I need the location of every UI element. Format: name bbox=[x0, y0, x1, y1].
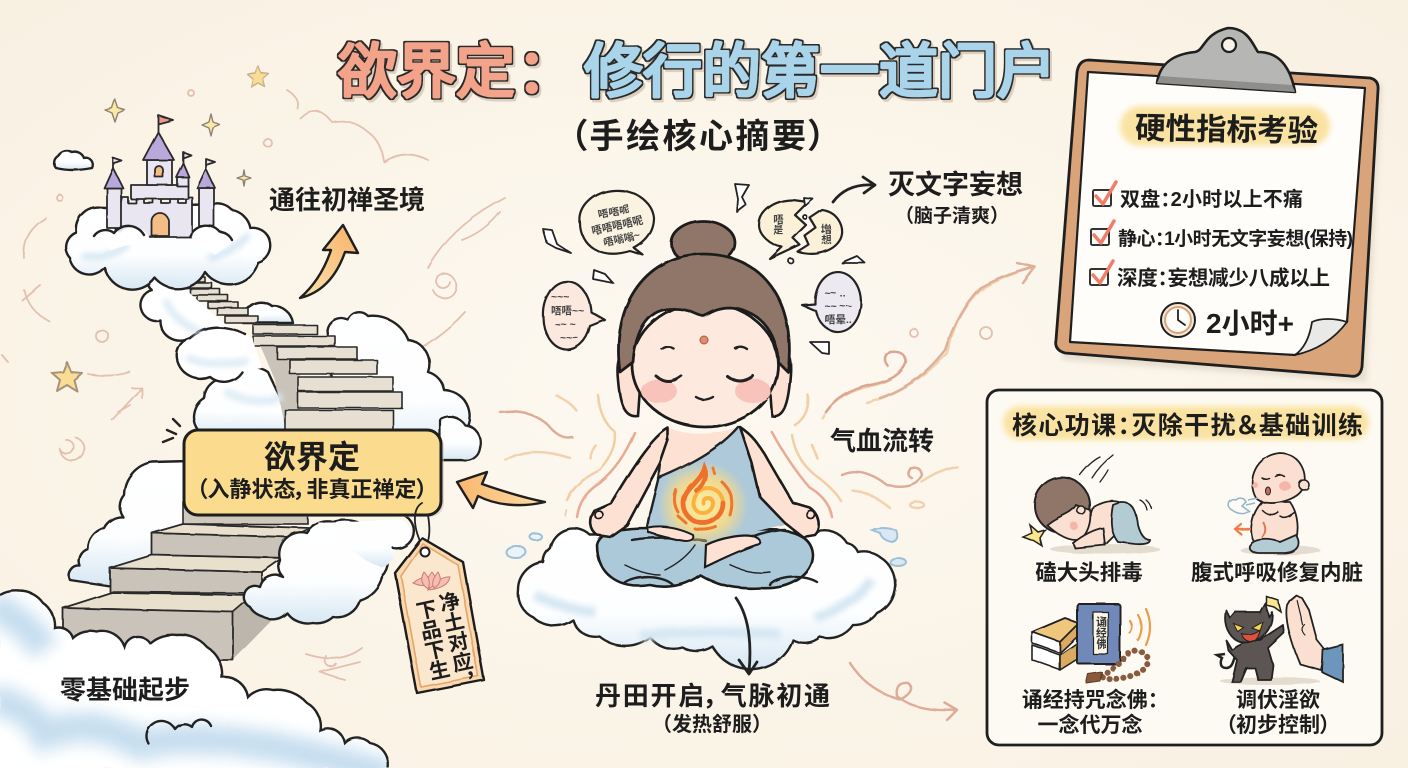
bubble 3 broken: 唔是 bbox=[772, 214, 784, 236]
castle on cloud bbox=[66, 115, 271, 290]
icon: clock bbox=[1161, 303, 1195, 337]
duration label: 2小时+ bbox=[1206, 308, 1294, 339]
label: wordless thought: 灭文字妄想 bbox=[888, 170, 1023, 200]
bubble 2: ~~ ~ bbox=[555, 319, 576, 331]
bubble 2: ~~~ bbox=[551, 291, 569, 303]
practice label 1: 磕大头排毒 bbox=[1035, 561, 1143, 585]
clipboard heading: 硬性指标考验 bbox=[1135, 111, 1318, 149]
label: to first dhyana: 通往初禅圣境 bbox=[269, 185, 425, 215]
label: clear head: （脑子清爽） bbox=[895, 205, 1009, 227]
icon: bowing child bbox=[1023, 455, 1160, 554]
bubble 4: ~~ ~~ bbox=[824, 300, 851, 312]
icon: breathing child bbox=[1229, 453, 1320, 555]
label: dantian: 丹田开启，气脉初通 bbox=[595, 681, 830, 711]
bubble 2: ~~~ bbox=[560, 332, 578, 344]
icon: sutras and beads: 诵经佛 bbox=[1094, 615, 1107, 650]
head bbox=[618, 221, 791, 427]
back clouds bbox=[69, 302, 481, 586]
bubble 2 bbox=[543, 281, 605, 350]
label: warmth: （发热舒服） bbox=[652, 712, 772, 736]
label: qi blood: 气血流转 bbox=[830, 426, 934, 456]
bubble 3 broken bbox=[759, 200, 842, 259]
panel heading: 核心功课：灭除干扰＆基础训练 bbox=[1012, 411, 1363, 440]
arms bbox=[591, 427, 819, 537]
stars bbox=[52, 66, 269, 391]
yellow box bbox=[184, 430, 444, 517]
tag text column 1: 净土对应， bbox=[434, 589, 479, 695]
decorative doodle lines bbox=[2, 90, 1035, 720]
checklist item 2: 静心：1小时无文字妄想(保持) bbox=[1118, 227, 1353, 250]
title: 欲界定：修行的第一道门户 bbox=[338, 24, 1056, 109]
upper stairs bbox=[152, 240, 402, 430]
checklist item 3: 深度：妄想减少八成以上 bbox=[1117, 266, 1330, 290]
core practice panel bbox=[987, 390, 1382, 745]
lower stairs bbox=[63, 500, 310, 660]
checklist item 1 bbox=[1093, 182, 1303, 211]
bubble 1: 唔嗡嗡~ bbox=[602, 230, 642, 249]
legs and robe bbox=[597, 427, 817, 588]
buddha figure bbox=[518, 221, 895, 670]
front cloud lower right bbox=[244, 514, 414, 624]
subtitle: （手绘核心摘要） bbox=[570, 118, 828, 156]
practice label 4b: （初步控制） bbox=[1226, 714, 1330, 737]
arrow: down to dantian bbox=[736, 598, 757, 674]
icon: devil and hand bbox=[1217, 595, 1343, 685]
arrow: to wordless bbox=[833, 177, 875, 202]
big cloud bottom left bbox=[0, 591, 390, 768]
tag text column 2: 下品下生 bbox=[411, 597, 452, 683]
practice label 2: 腹式呼吸修复内脏 bbox=[1191, 561, 1363, 585]
bubble 1 bbox=[580, 190, 654, 255]
arrow: to yellow box bbox=[457, 472, 545, 508]
cloud seat bbox=[518, 528, 895, 670]
bubble 4 bbox=[802, 272, 861, 332]
icon: sutras and beads bbox=[1032, 604, 1150, 683]
arrow: up to castle bbox=[300, 225, 358, 298]
icon: lotus bbox=[413, 572, 450, 590]
bubble 3 broken: 增想 bbox=[820, 223, 832, 245]
spiral dantian bbox=[674, 468, 732, 530]
clouds beside stairs bbox=[140, 272, 282, 401]
box subtitle: （入静状态，非真正禅定） bbox=[196, 477, 428, 502]
bubble 2: 唔唔~~ bbox=[551, 305, 584, 317]
label: start: 零基础起步 bbox=[60, 675, 190, 705]
small cloud bbox=[54, 151, 93, 170]
speech bubbles bbox=[543, 184, 865, 354]
practice label 3b: 一念代万念 bbox=[1038, 713, 1142, 737]
hanging tag bbox=[395, 503, 484, 695]
bubble 4: 唔晕.. bbox=[825, 314, 852, 326]
metal clip bbox=[1157, 28, 1295, 92]
bubble 1: 唔唔呢 bbox=[597, 203, 631, 222]
practice label 3: 诵经持咒念佛： bbox=[1022, 688, 1158, 712]
shards bbox=[543, 184, 865, 354]
staircase scene bbox=[0, 66, 481, 768]
bubble 1: 唔唔唔唔呢 bbox=[591, 215, 645, 237]
box title: 欲界定 bbox=[264, 439, 360, 475]
checklist item 1: 双盘：2小时以上不痛 bbox=[1120, 187, 1303, 211]
checklist item 2 bbox=[1091, 221, 1353, 250]
clipboard panel bbox=[1056, 28, 1382, 382]
cloud behind sign right bbox=[440, 417, 481, 461]
bubble 4: ~~ .. bbox=[824, 287, 845, 299]
paper curl bbox=[1295, 319, 1347, 355]
practice label 4: 调伏淫欲 bbox=[1236, 688, 1320, 712]
decorative ticks bbox=[163, 419, 180, 442]
